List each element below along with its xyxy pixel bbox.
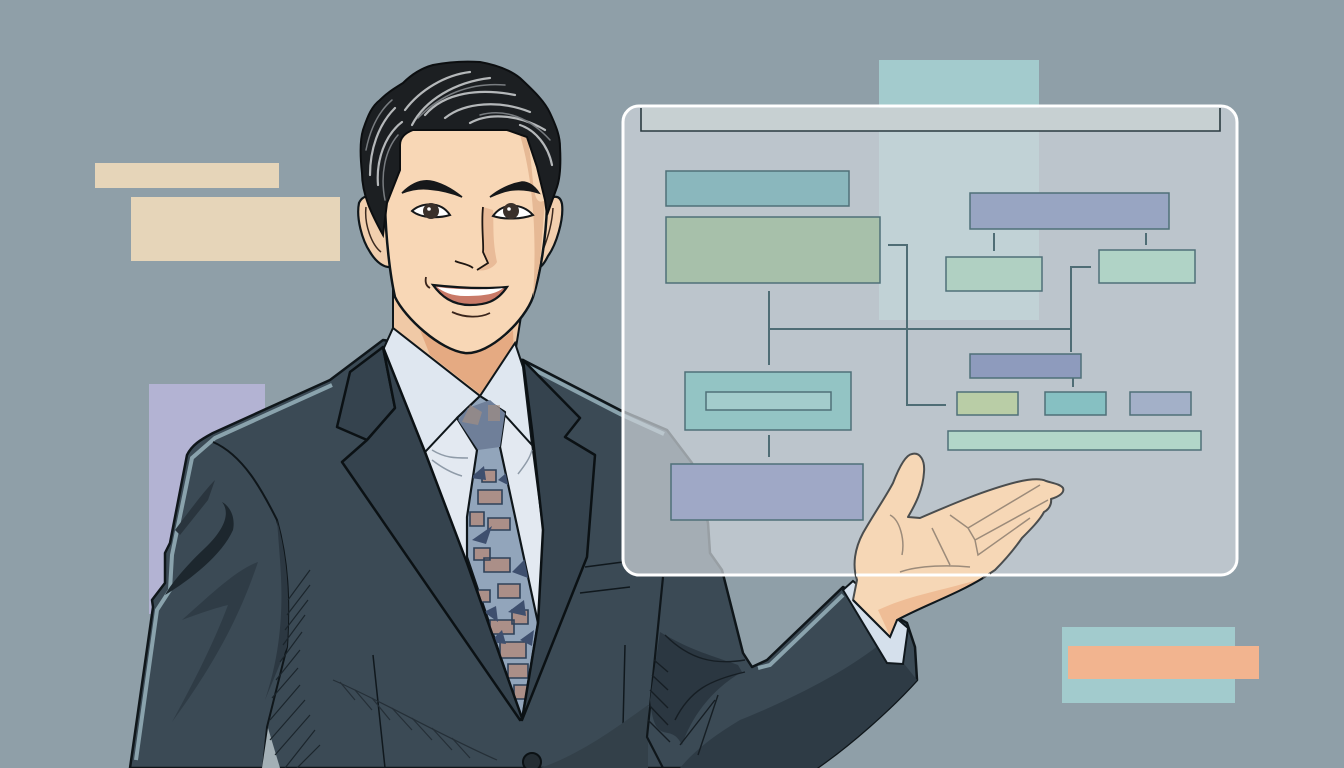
- panel: transparent diagram board: [623, 106, 1237, 575]
- decorative block: tan top left: [95, 163, 340, 261]
- forearm shade: [680, 640, 917, 768]
- chest fold shading: [333, 680, 497, 760]
- diagram boxes: [666, 171, 1201, 520]
- panel edge across hand: [856, 574, 990, 576]
- shirt: [425, 413, 543, 625]
- palm and fingers: [853, 454, 1063, 637]
- nose: [455, 207, 488, 270]
- presenter head: [358, 62, 562, 353]
- ears: [358, 196, 391, 267]
- shirt folds: [432, 450, 532, 476]
- face: [385, 125, 547, 353]
- jacket button: [523, 753, 541, 768]
- wrist shadow: [878, 579, 980, 636]
- underarm folds: [647, 577, 663, 768]
- connector lines: [769, 233, 1146, 457]
- neck shadow: [420, 330, 514, 394]
- sleeve seam and left arm details: [213, 442, 288, 768]
- presenter hand: [843, 454, 1063, 664]
- hair highlights: [370, 72, 552, 185]
- jacket highlights: [136, 366, 843, 760]
- shirt cuff: [843, 581, 908, 664]
- shirt collar: [383, 328, 532, 452]
- decorative block: lavender: [149, 384, 265, 614]
- eyebrows: [402, 181, 539, 197]
- illustration: presenter and diagram: [95, 60, 1259, 768]
- jacket lapels: [337, 347, 595, 720]
- decorative block: bottom right: [1062, 627, 1259, 703]
- suit jacket: [130, 340, 917, 768]
- suit front lines: [373, 473, 630, 768]
- right eye: [493, 203, 533, 219]
- hatching under left arm: [270, 570, 320, 768]
- face shadow: [520, 135, 545, 297]
- palm lines: [890, 485, 1048, 572]
- necktie: [457, 396, 538, 720]
- presenter body: [130, 290, 917, 768]
- hair: [361, 62, 560, 235]
- left eye: [412, 203, 450, 219]
- decorative block: teal top: [879, 60, 1039, 320]
- panel top bar: [641, 108, 1220, 131]
- neck: [393, 290, 522, 396]
- mouth: [426, 277, 507, 317]
